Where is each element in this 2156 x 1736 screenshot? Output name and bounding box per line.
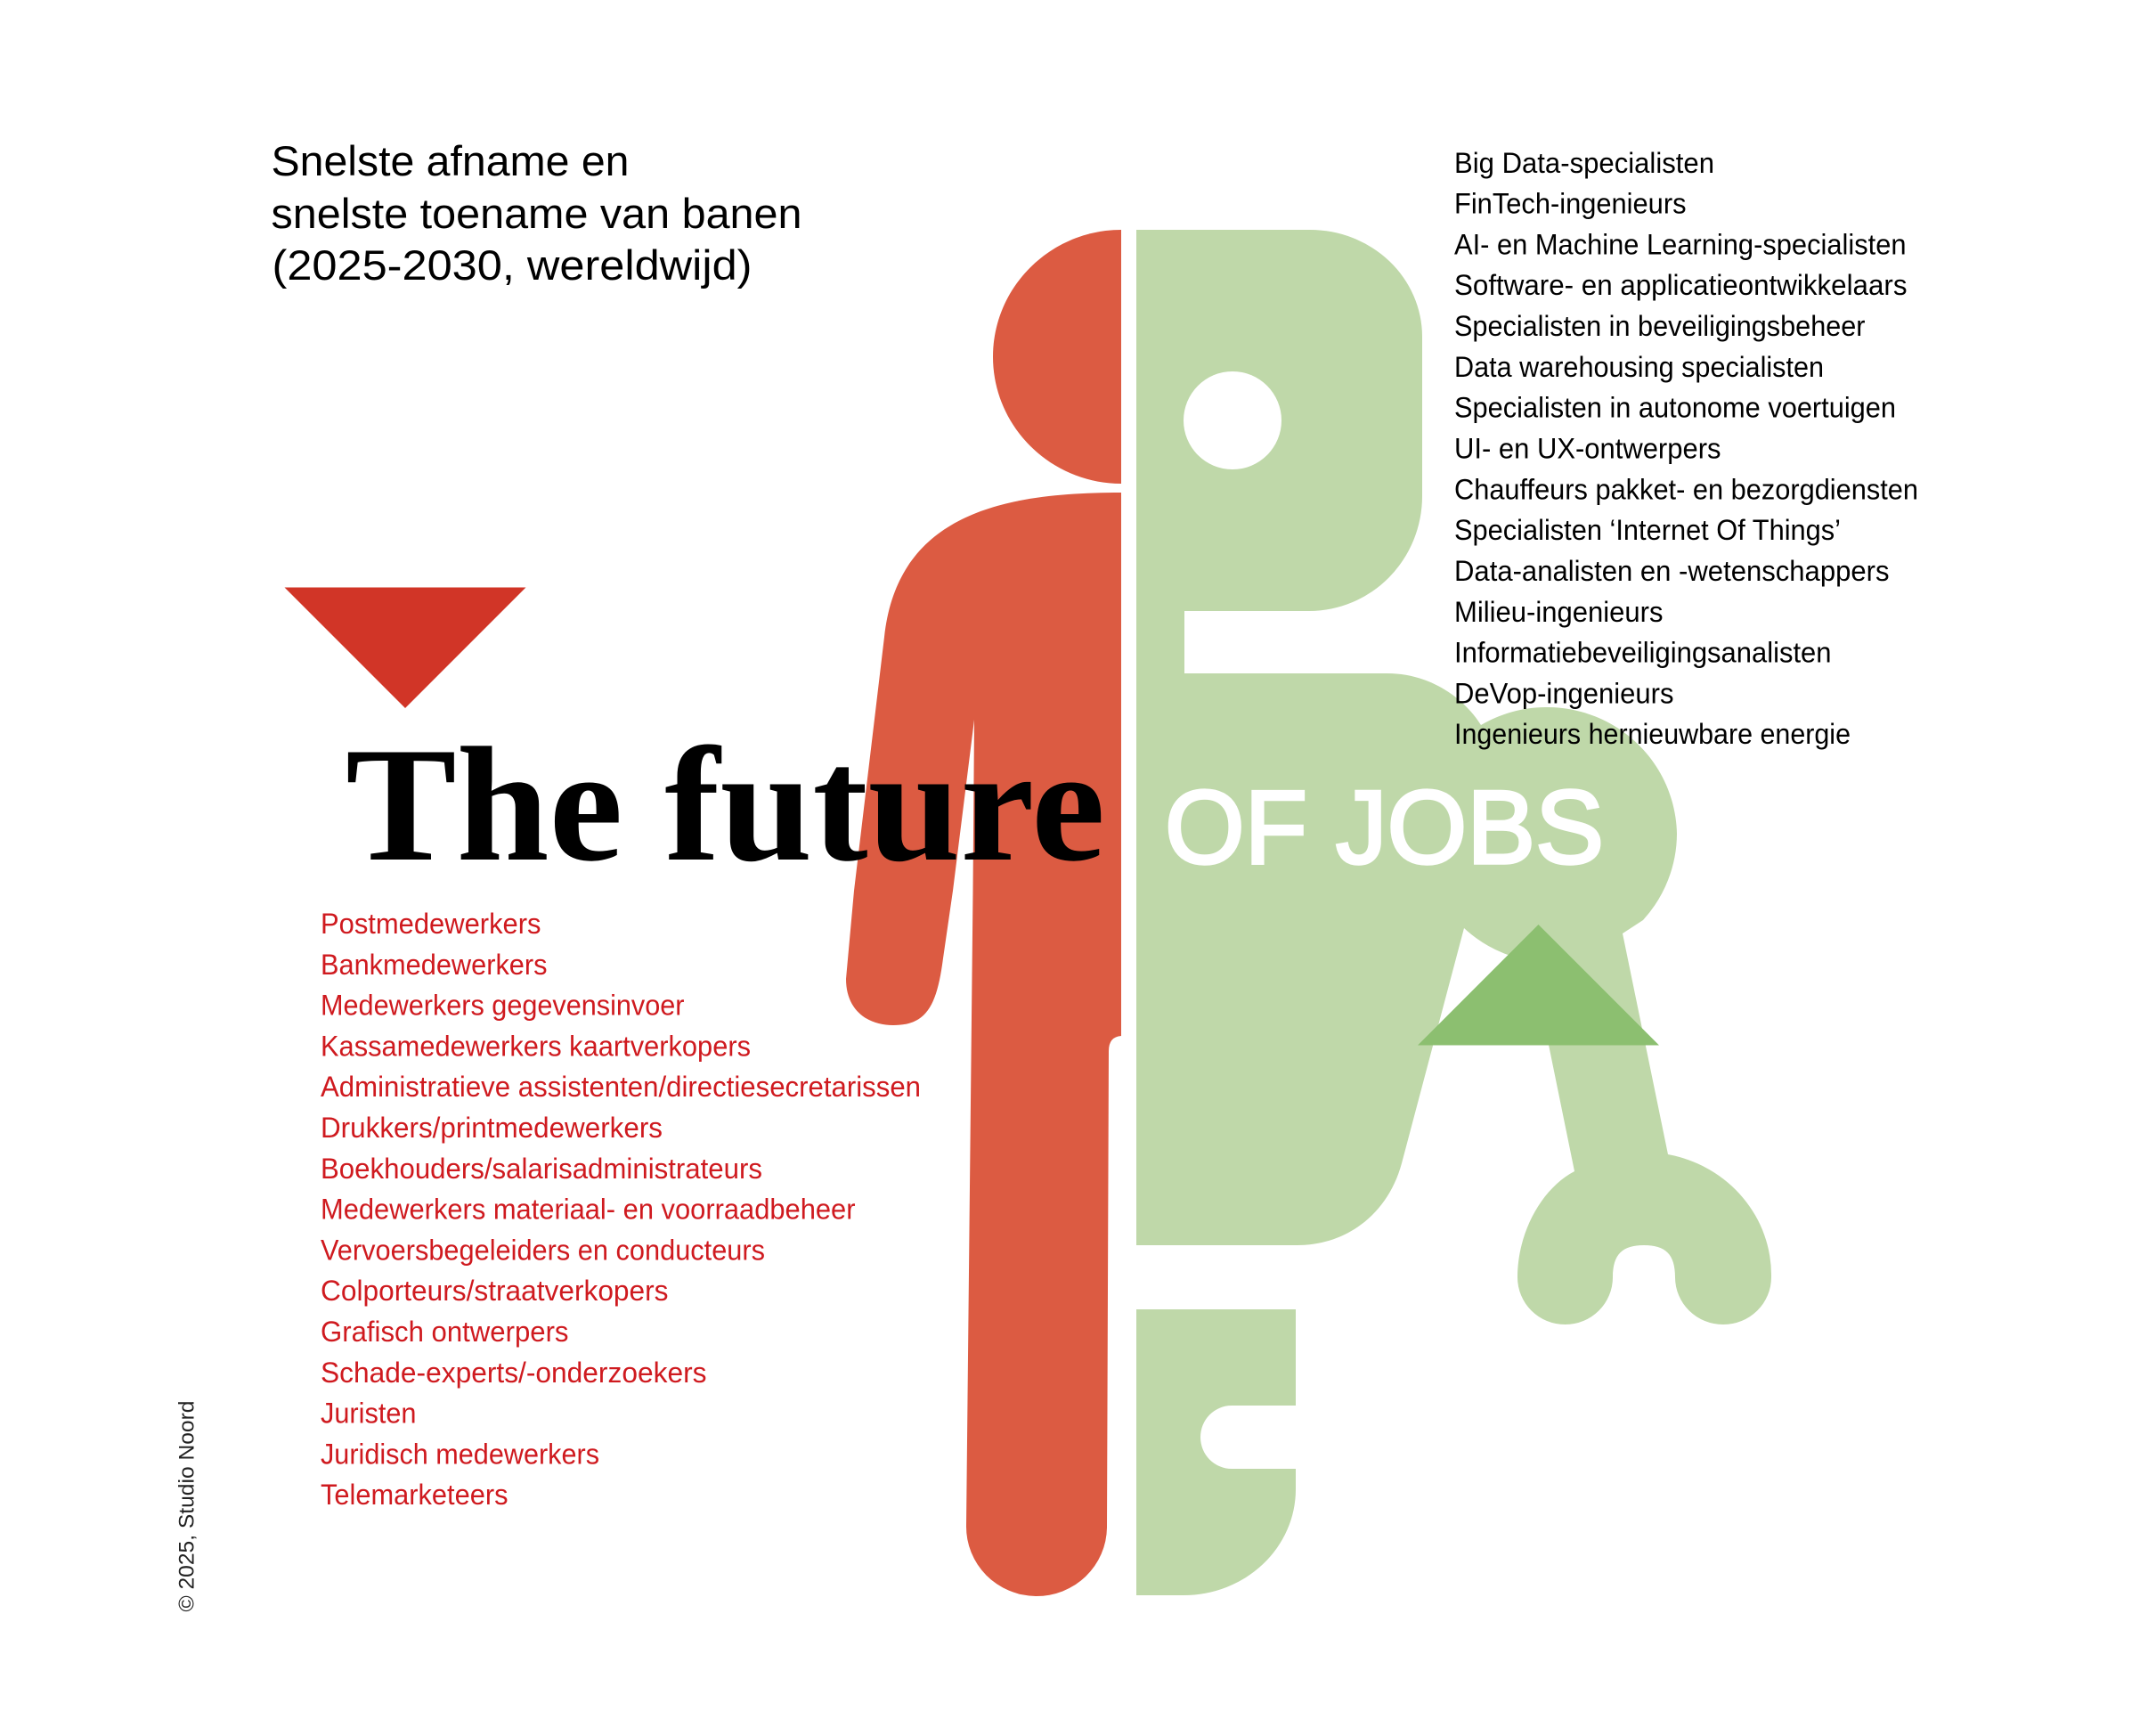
list: fastest declining jobs	[321, 908, 921, 1511]
list: fastest growing jobs: DeVop-ingenieurs	[1454, 677, 1674, 709]
list: fastest growing jobs: AI- en Machine Learning-specialisten	[1454, 228, 1906, 260]
list: fastest declining jobs: Medewerkers materiaal- en voorraadbeheer	[321, 1194, 856, 1226]
icon: red triangle down	[285, 588, 525, 708]
list: fastest declining jobs: Kassamedewerkers kaartverkopers	[321, 1030, 751, 1062]
human body	[846, 493, 1121, 1596]
list: fastest growing jobs: Milieu-ingenieurs	[1454, 596, 1664, 628]
list: fastest growing jobs: Specialisten in beveiligingsbeheer	[1454, 310, 1866, 342]
list: fastest declining jobs: Grafisch ontwerpers	[321, 1316, 568, 1348]
list: fastest growing jobs: Chauffeurs pakket- en bezorgdiensten	[1454, 473, 1918, 505]
list: fastest declining jobs: Schade-experts/-onderzoekers	[321, 1357, 707, 1389]
icon: green triangle up	[1418, 925, 1659, 1046]
list: fastest declining jobs: Bankmedewerkers	[321, 949, 547, 981]
title: OF JOBS: OF JOBS	[1165, 769, 1604, 885]
list: fastest growing jobs: Specialisten ‘Internet Of Things’	[1454, 514, 1841, 546]
list: fastest declining jobs: Medewerkers gegevensinvoer	[321, 990, 685, 1022]
list: fastest growing jobs: UI- en UX-ontwerpers	[1454, 433, 1721, 465]
title: The future: The future	[346, 713, 1105, 895]
heading: (2025-2030, wereldwijd)	[273, 241, 752, 289]
robot eye	[1184, 371, 1281, 469]
list: fastest declining jobs: Juristen	[321, 1398, 417, 1430]
heading: Snelste afname en	[271, 137, 629, 184]
robot head, body and arm	[1136, 230, 1771, 1324]
list: fastest declining jobs: Postmedewerkers	[321, 908, 541, 940]
list: fastest growing jobs: Informatiebeveiligingsanalisten	[1454, 637, 1831, 669]
human head	[993, 230, 1121, 484]
figure: half human, half robot	[846, 230, 1771, 1596]
list: fastest growing jobs	[1454, 147, 1918, 750]
list: fastest declining jobs: Telemarketeers	[321, 1479, 508, 1511]
list: fastest declining jobs: Drukkers/printmedewerkers	[321, 1112, 663, 1144]
heading	[271, 137, 801, 289]
list: fastest growing jobs: Software- en applicatieontwikkelaars	[1454, 269, 1908, 301]
credit: copyright: © 2025, Studio Noord	[175, 1400, 199, 1612]
list: fastest growing jobs: Specialisten in autonome voertuigen	[1454, 392, 1896, 424]
list: fastest growing jobs: Data warehousing specialisten	[1454, 351, 1824, 383]
list: fastest growing jobs: Data-analisten en -wetenschappers	[1454, 555, 1890, 587]
list: fastest declining jobs: Administratieve assistenten/directiesecretarissen	[321, 1071, 921, 1103]
list: fastest declining jobs: Boekhouders/salarisadministrateurs	[321, 1153, 762, 1185]
list: fastest declining jobs: Juridisch medewerkers	[321, 1438, 599, 1470]
list: fastest declining jobs: Colporteurs/straatverkopers	[321, 1275, 668, 1307]
list: fastest growing jobs: Big Data-specialisten	[1454, 147, 1714, 179]
list: fastest growing jobs: FinTech-ingenieurs	[1454, 188, 1687, 220]
robot leg	[1136, 1309, 1296, 1595]
list: fastest growing jobs: Ingenieurs hernieuwbare energie	[1454, 718, 1851, 750]
heading: snelste toename van banen	[271, 190, 801, 237]
list: fastest declining jobs: Vervoersbegeleiders en conducteurs	[321, 1234, 765, 1266]
